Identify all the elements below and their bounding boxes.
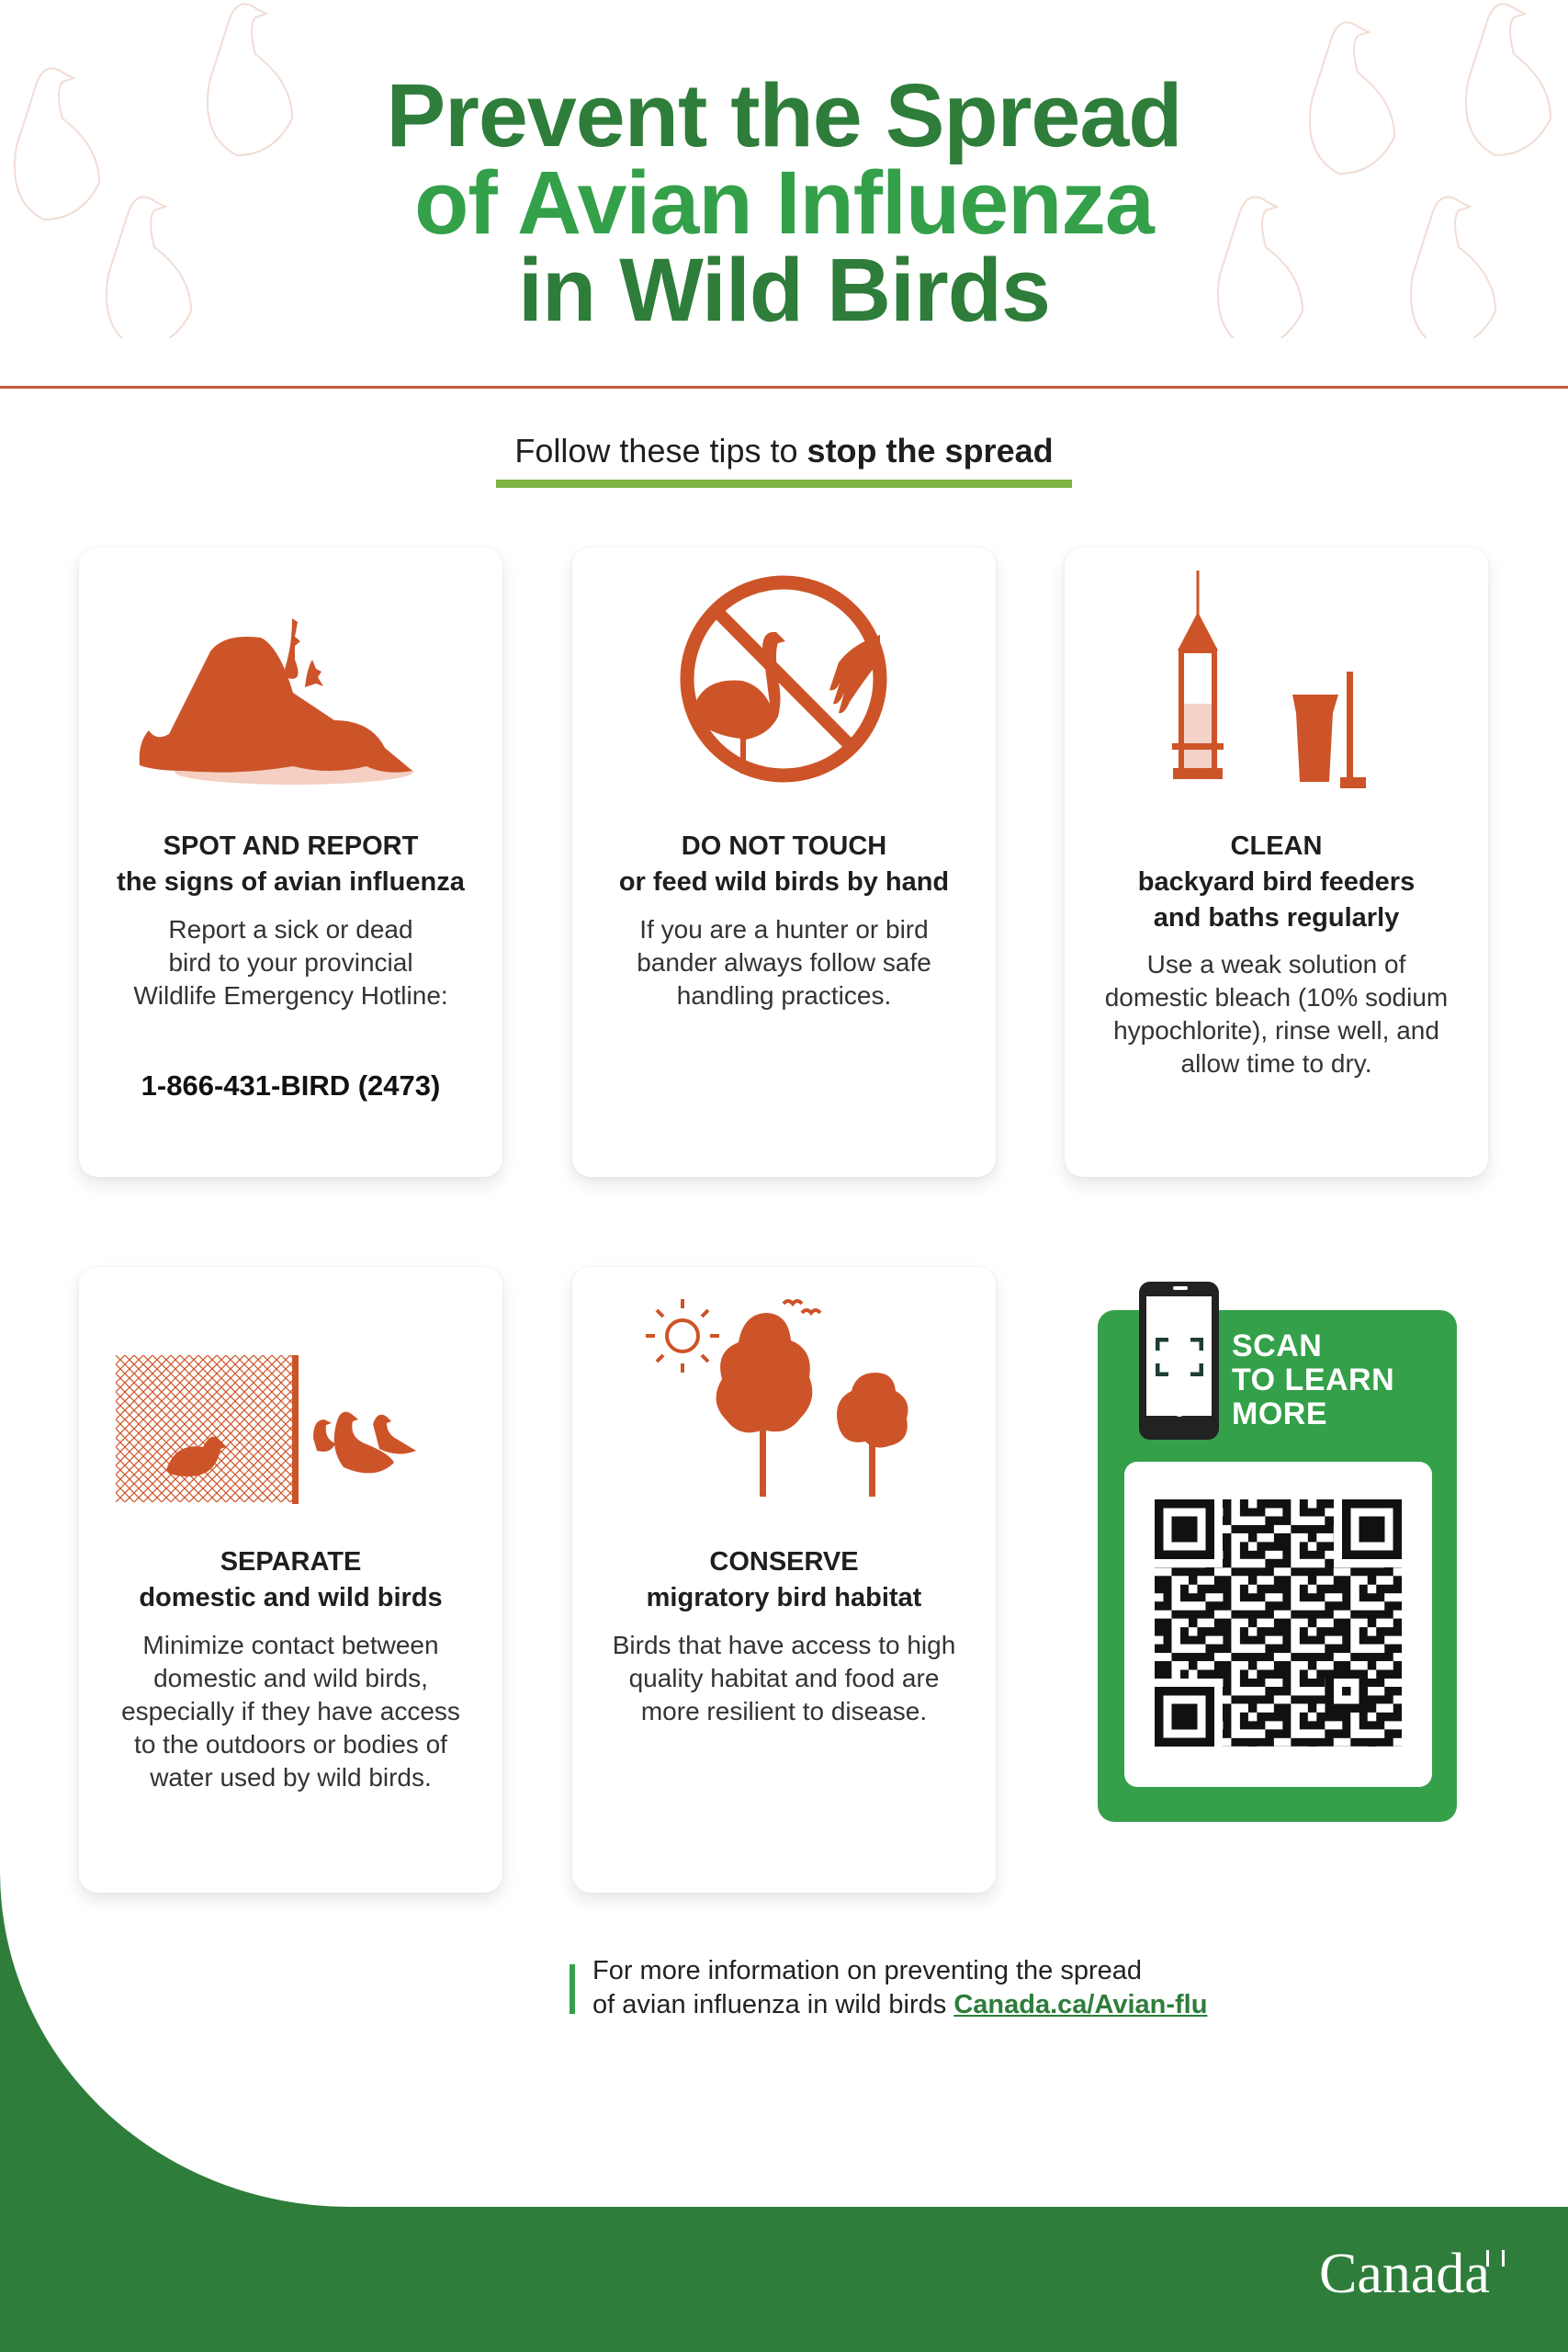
body text: bander always follow safe xyxy=(637,948,931,977)
scan text xyxy=(1232,1329,1394,1431)
body text: allow time to dry. xyxy=(1181,1049,1372,1078)
body text: Wildlife Emergency Hotline: xyxy=(133,981,448,1010)
text: of avian influenza in wild birds Canada.ca/Avian-flu xyxy=(592,1990,1207,2019)
body text: Minimize contact between xyxy=(142,1631,439,1659)
scan text: SCAN xyxy=(1232,1329,1322,1363)
icon: dead bird xyxy=(140,618,413,785)
body text: Use a weak solution of xyxy=(1147,950,1405,978)
body text: water used by wild birds. xyxy=(150,1763,432,1792)
body text xyxy=(613,1631,955,1725)
title: of Avian Influenza xyxy=(414,153,1154,253)
body text: quality habitat and food are xyxy=(629,1664,939,1692)
body text: domestic bleach (10% sodium xyxy=(1105,983,1448,1012)
phone number: 1-866-431-BIRD (2473) xyxy=(141,1069,440,1102)
heading: migratory bird habitat xyxy=(647,1583,921,1612)
heading: CLEAN xyxy=(1231,831,1322,861)
heading: CONSERVE xyxy=(709,1547,859,1577)
heading: domestic and wild birds xyxy=(139,1583,443,1612)
logo: Canada wordmark: Canada xyxy=(1319,2243,1490,2305)
scan text: MORE xyxy=(1232,1396,1327,1431)
body text: Birds that have access to high xyxy=(613,1631,955,1659)
scan text: TO LEARN xyxy=(1232,1363,1394,1397)
text: For more information on preventing the spread xyxy=(592,1956,1142,1985)
body text: Report a sick or dead xyxy=(168,915,413,944)
icon: feeder and bucket xyxy=(1172,571,1366,788)
card: separate xyxy=(79,1267,502,1893)
background duck pattern xyxy=(14,3,1551,338)
divider xyxy=(0,386,1568,389)
icon: fence and birds xyxy=(116,1355,416,1504)
body text xyxy=(121,1631,460,1792)
icon: no touch xyxy=(680,575,887,783)
title xyxy=(386,65,1182,340)
panel: scan QR xyxy=(1098,1310,1457,1822)
heading: backyard bird feeders xyxy=(1138,867,1415,897)
heading: SEPARATE xyxy=(220,1547,361,1577)
heading xyxy=(139,1547,443,1612)
heading: and baths regularly xyxy=(1154,903,1399,933)
body text: bird to your provincial xyxy=(168,948,413,977)
body text: hypochlorite), rinse well, and xyxy=(1113,1016,1439,1045)
heading xyxy=(647,1547,921,1612)
subtitle: Follow these tips to stop the spread xyxy=(514,432,1054,469)
card: conserve xyxy=(572,1267,996,1893)
body text: handling practices. xyxy=(677,981,891,1010)
body text: domestic and wild birds, xyxy=(153,1664,428,1692)
card: spot and report xyxy=(79,548,502,1177)
heading xyxy=(619,831,949,897)
heading: DO NOT TOUCH xyxy=(682,831,886,861)
body text: If you are a hunter or bird xyxy=(639,915,929,944)
heading: the signs of avian influenza xyxy=(117,867,465,897)
icon: phone xyxy=(1139,1282,1219,1440)
body text: especially if they have access xyxy=(121,1697,460,1725)
footer text xyxy=(570,1964,575,2014)
title: Prevent the Spread xyxy=(386,65,1182,165)
heading: or feed wild birds by hand xyxy=(619,867,949,897)
body text xyxy=(133,915,448,1010)
body text xyxy=(1105,950,1448,1078)
heading: SPOT AND REPORT xyxy=(164,831,418,861)
body text xyxy=(637,915,931,1010)
title: in Wild Birds xyxy=(518,240,1050,340)
qr box xyxy=(1124,1462,1432,1787)
card: do not touch xyxy=(572,548,996,1177)
heading xyxy=(1138,831,1415,933)
card: clean xyxy=(1065,548,1488,1177)
body text: more resilient to disease. xyxy=(641,1697,927,1725)
heading xyxy=(117,831,465,897)
icon: sun and trees xyxy=(646,1299,908,1497)
body text: to the outdoors or bodies of xyxy=(134,1730,447,1758)
